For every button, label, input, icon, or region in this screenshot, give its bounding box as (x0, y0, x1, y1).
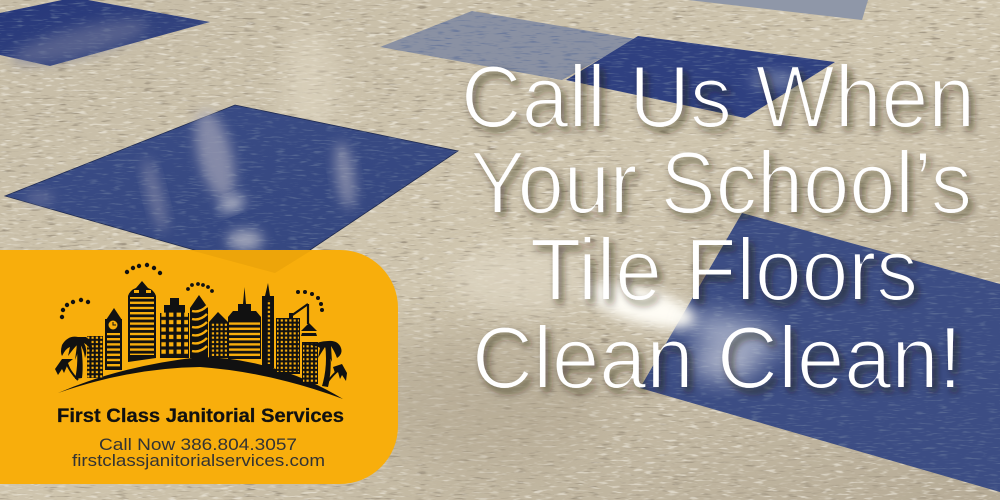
palm: left small (55, 359, 78, 380)
sun rays (60, 263, 324, 319)
building: right small grid (302, 342, 318, 384)
building: small grid (209, 312, 228, 358)
tile: top right faint grey (688, 0, 868, 20)
headline: Call Us When (461, 47, 975, 146)
logo: city skyline (55, 263, 347, 399)
building: right grid (276, 318, 300, 374)
tile: top grey (380, 11, 636, 80)
ground arc (58, 357, 343, 399)
tile: lower right blue (640, 213, 1000, 492)
building: left small grid (87, 336, 103, 378)
building: clock tower (105, 308, 122, 370)
headline (461, 47, 975, 407)
building: stepped grid (160, 298, 189, 358)
tile: upper right blue (566, 36, 835, 118)
website: firstclassjanitorialservices.com (72, 451, 325, 470)
phone number: Call Now 386.804.3057 (99, 435, 297, 454)
floor glare (284, 30, 1000, 470)
company name: First Class Janitorial Services (57, 406, 344, 427)
crane (289, 304, 317, 336)
building: curved stripes (190, 295, 208, 358)
headline: Clean Clean! (472, 308, 962, 407)
headline: Tile Floors (530, 220, 918, 319)
tile: top left blue (0, 0, 210, 66)
palm: right large (312, 341, 342, 387)
palm: right small (326, 364, 347, 384)
building: domed tower (128, 281, 156, 362)
tile reflections (9, 11, 801, 380)
building: wide spire (228, 287, 261, 359)
panel: company card (0, 250, 398, 484)
tile: center blue (5, 105, 458, 273)
headline: Your School’s (470, 133, 972, 232)
palm: left large (61, 337, 92, 379)
building: slim spire (262, 283, 274, 368)
